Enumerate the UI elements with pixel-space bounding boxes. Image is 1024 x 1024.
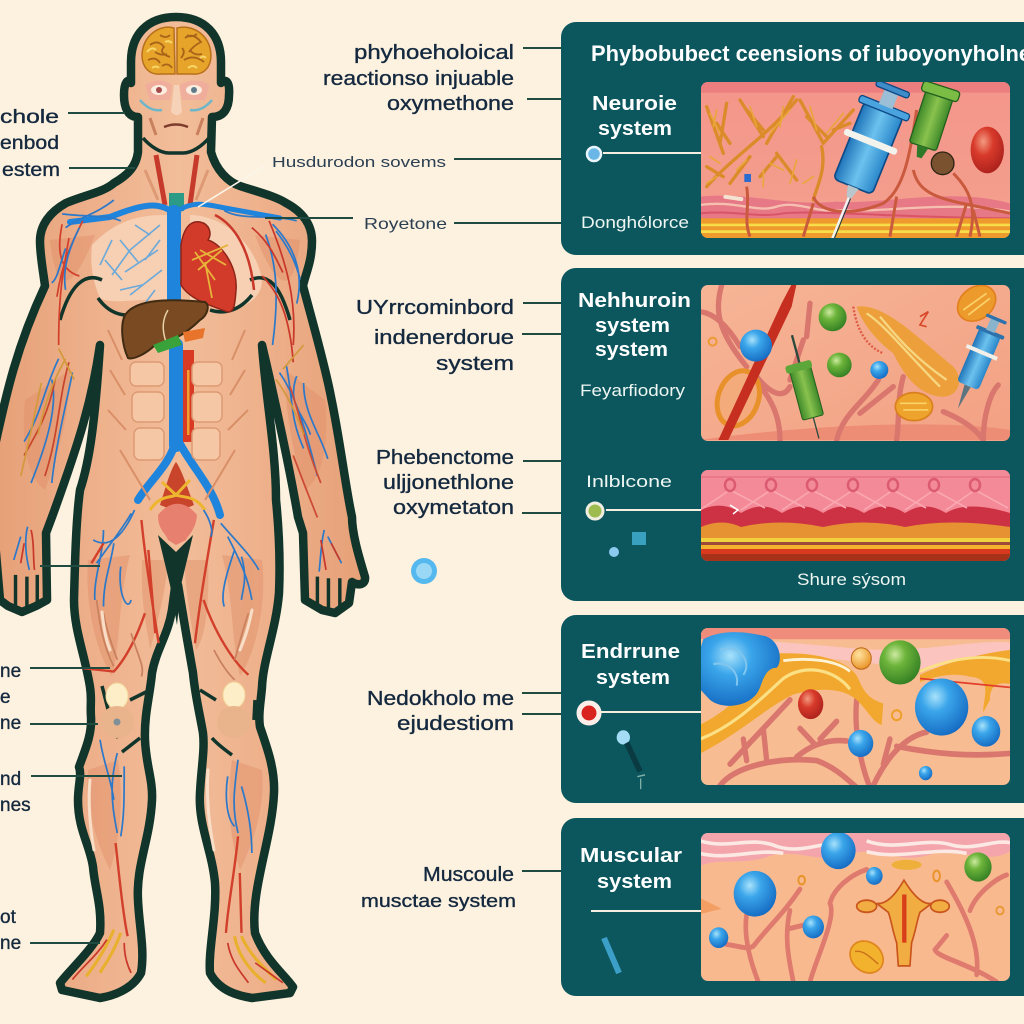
left labels: lower limbs: e (0, 687, 11, 708)
illustration: gland and cells (700, 627, 1013, 787)
panel background (561, 615, 1024, 803)
hand vessels (14, 527, 342, 610)
small vial (785, 334, 824, 439)
callout line white (198, 165, 266, 207)
heading: Nehhuroin (578, 290, 691, 312)
body silhouette (0, 17, 365, 998)
face and torso contours (60, 138, 290, 755)
text block: UYrrcominbord (356, 297, 514, 319)
left labels: upper system: enbod (0, 133, 59, 154)
right label: endocrine: ejudestiom (397, 713, 514, 735)
left labels: upper system: estem (2, 160, 60, 181)
panel background (561, 818, 1024, 996)
text block: Nedokholo me (367, 688, 514, 710)
left labels: upper system (0, 107, 135, 181)
panel: endocrine system: system (596, 667, 670, 689)
text block: phyhoeholoical (354, 42, 514, 64)
neuro caption: Donghólorce (581, 213, 689, 232)
right label: royetone (265, 216, 561, 233)
illustration: skin layers (700, 470, 1010, 561)
right label: muscular (361, 864, 561, 911)
right label: cardiovascular: indenerdorue (374, 327, 514, 349)
leg vessels (72, 510, 283, 983)
icon: blue capsule (411, 558, 437, 584)
uterus (857, 880, 949, 966)
marker (579, 703, 735, 723)
knees (100, 682, 251, 738)
right label: cardiovascular: system (436, 353, 514, 375)
right label: muscular: musctae system (361, 891, 516, 911)
panel background (561, 268, 1024, 601)
arm vessels (21, 200, 328, 518)
neuro heading: Neuroie (592, 93, 677, 115)
thigh highlights (89, 610, 252, 850)
left labels: lower limbs (0, 566, 122, 954)
right label: oxymetaton: oxymetaton (393, 497, 514, 519)
icon: small vial (604, 938, 619, 973)
skin marker (587, 503, 745, 519)
panel title: Phybobubect ceensions of iuboyonyholne (591, 41, 1024, 66)
panel: neurologic system: system (598, 118, 672, 140)
small pills (609, 532, 646, 557)
vial (909, 82, 960, 158)
right label: cardiovascular (356, 297, 561, 375)
icon: small syringe (617, 730, 645, 789)
text block: Husdurodon sovems (272, 154, 446, 171)
face features (140, 80, 212, 135)
label fragments: ne (0, 661, 21, 682)
right label: physiological reactions: reactionso injuable (323, 68, 514, 90)
icon: heart (181, 215, 254, 312)
flank muscle lines (108, 330, 248, 500)
icon: liver (122, 300, 208, 358)
pointer line (591, 910, 725, 912)
crotch shadow (158, 535, 193, 625)
panel: nervous and skin systems: system (595, 339, 668, 361)
text block: Phebenctome (376, 447, 514, 469)
illustration: muscle and reproductive organs (700, 832, 1013, 982)
abdominal muscles (130, 362, 222, 460)
blue central vein (70, 204, 280, 515)
right label: endocrine (367, 688, 561, 735)
panel: muscular system: system (597, 871, 672, 893)
muscle shading (24, 235, 326, 870)
small syringe (958, 314, 1007, 408)
right label: oxymetaton: uljjonethlone (383, 472, 514, 494)
panel: neurologic system (561, 22, 1024, 278)
right label: physiological reactions: oxymethone (387, 93, 514, 115)
icon: brain (142, 27, 211, 74)
text block: Royetone (364, 216, 447, 233)
skin heading: Inlblcone (586, 472, 672, 491)
neck vessels (145, 155, 208, 211)
panel: endocrine system (561, 615, 1024, 803)
chest area (91, 215, 262, 308)
left labels: lower limbs: nes (0, 795, 31, 816)
panel: nervous and skin systems: system (595, 315, 670, 337)
illustration: nerves and syringe (701, 82, 1010, 238)
right label: physiological reactions (323, 42, 561, 115)
neuro marker (587, 147, 722, 161)
aorta (183, 350, 194, 442)
heading: Muscular (580, 845, 682, 867)
syringe (831, 82, 910, 238)
left labels: lower limbs: ot (0, 907, 17, 928)
pelvic organs (150, 462, 205, 545)
heading: Endrrune (581, 641, 680, 663)
panel: muscular system (561, 818, 1024, 996)
label text: chole (0, 107, 59, 128)
lung vessels (100, 225, 162, 310)
panel: nervous and skin systems (561, 268, 1024, 601)
skin caption: Shure sýsom (797, 570, 906, 589)
right label: oxymetaton (376, 447, 561, 519)
left labels: lower limbs: ne (0, 933, 21, 954)
left labels: lower limbs: ne (0, 713, 21, 734)
panel background (561, 22, 1024, 255)
left labels: lower limbs: nd (0, 769, 21, 790)
caption: Feyarfiodory (580, 381, 686, 400)
text block: Muscoule (423, 864, 514, 886)
illustration: cells and needle (701, 285, 1010, 441)
human body figure (0, 17, 365, 998)
